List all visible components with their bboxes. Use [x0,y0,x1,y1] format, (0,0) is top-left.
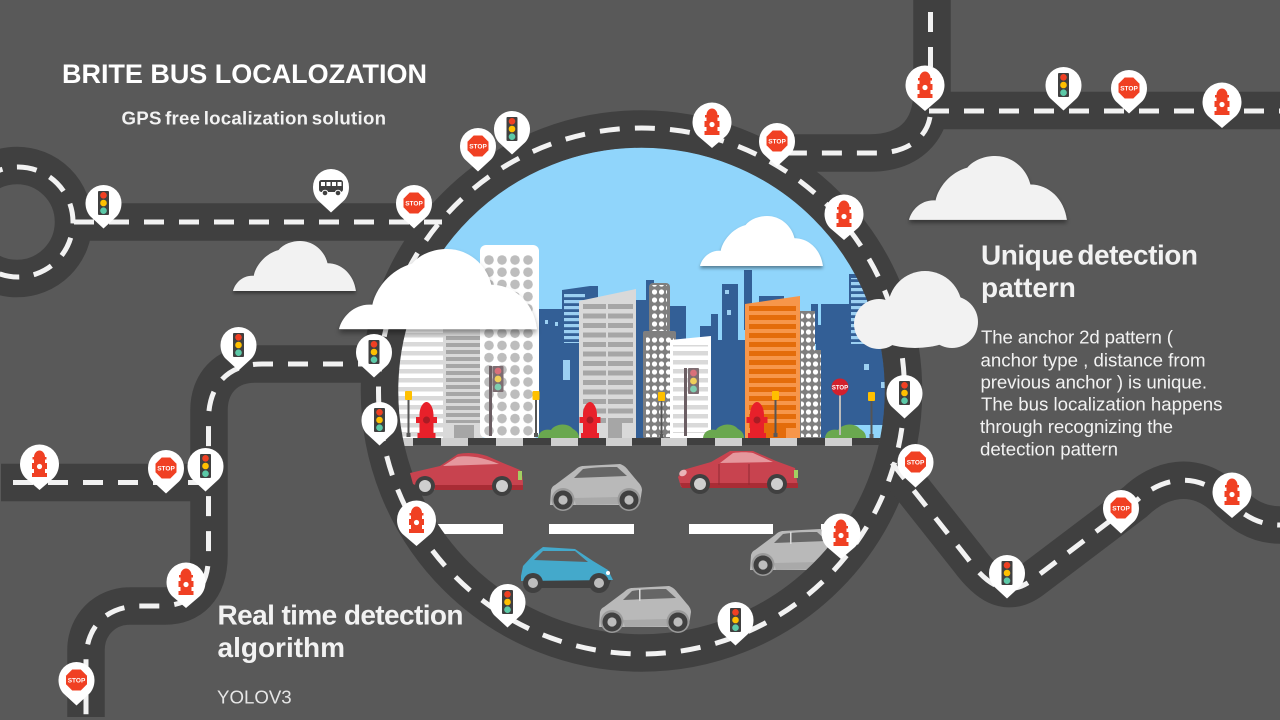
ring road [380,129,904,653]
white dotted tower [480,245,539,438]
street stop sign [832,378,848,435]
clouds [233,156,1067,349]
street traffic lights [489,366,699,436]
street hydrants [416,402,768,438]
pin: stop [58,662,94,706]
pin: stop [898,444,934,488]
subtitle: GPS free localization solution [122,108,386,128]
blue skyline [539,270,885,438]
white striped building [670,336,711,438]
cloud: top right [909,156,1067,220]
pin: stop [1111,70,1147,114]
pin: stop [396,185,432,228]
road: upper left [73,203,445,241]
pin: traffic light [989,555,1025,598]
pin: stop [460,128,496,172]
pin: stop [759,123,795,166]
body text: detection pattern: through recognizing the [980,416,1173,437]
grey car top [550,464,642,511]
pin: traffic light [356,334,392,378]
pin: traffic light [188,448,224,492]
heading: unique detection pattern [981,240,1198,303]
blue car [521,547,613,593]
bushes [538,425,866,438]
orange building [745,296,800,438]
left striped building [398,329,444,438]
pin: stop: STOP [1112,505,1130,512]
pin: hydrant [166,562,206,608]
left roundabout [0,166,74,278]
pin: stop: STOP [157,465,175,472]
street stop sign: STOP [832,386,848,392]
pin: stop [148,450,184,494]
cloud: over road left [233,241,356,291]
heading: real time detection algorithm [218,600,464,663]
body text: detection pattern: The anchor 2d pattern ( [981,326,1174,348]
heading: real time detection algorithm: Real time detection [218,600,464,630]
grey car bottom [599,586,691,633]
pin: traffic light [220,327,256,370]
pin: hydrant [20,444,59,490]
pin: hydrant [692,102,732,148]
body text: yolov3: YOLOV3 [217,686,292,708]
pin: traffic light [494,111,530,154]
title: BRITE BUS LOCALOZATION [62,59,427,89]
body text: detection pattern: anchor type , distance from [980,350,1206,370]
pin: stop [1103,490,1139,534]
pin: traffic light [490,584,526,628]
sky [395,145,890,445]
pin: stop: STOP [1120,85,1138,92]
pin: stop: STOP [469,143,487,150]
red car right [678,451,798,494]
pin: traffic light [886,375,922,418]
body text: detection pattern [980,326,1222,460]
grey car right, partly behind ring road [750,529,842,576]
pin: hydrant [1202,82,1242,128]
heading: real time detection algorithm: algorithm [218,632,345,663]
street lamps [405,391,875,438]
pin: stop: STOP [405,200,423,207]
cloud: right puffy [854,271,978,349]
body text: detection pattern: detection pattern [980,438,1118,460]
pin: bus [313,169,349,212]
body text: detection pattern: previous anchor ) is unique. [980,372,1207,392]
road: top right horizontal [915,92,1280,129]
cloud: large over city [339,249,537,329]
city scene in circle [395,145,890,446]
heading: unique detection pattern: Unique detection [981,240,1198,270]
heading: unique detection pattern: pattern [981,272,1076,303]
pin: traffic light [718,602,754,646]
road: left arm [1,464,205,501]
light grey building [579,289,636,438]
pin: stop: STOP [907,459,925,466]
road: lower right [892,463,1280,589]
lane stripes [437,524,841,534]
road: left winding [86,364,382,717]
pin: traffic light [362,402,398,446]
pin: stop: STOP [68,677,86,684]
pin: stop: STOP [768,138,786,145]
skyline windows [545,278,885,388]
body text: detection pattern: The bus localization happens [981,394,1222,414]
pin: hydrant [824,194,864,240]
red car left [410,453,523,496]
pin: traffic light [86,185,122,228]
pin: hydrant [906,66,944,111]
pin: hydrant [1212,472,1252,518]
second grey tower [800,311,821,438]
road: top right vertical [770,0,932,153]
pin: hydrant [822,514,860,559]
sky cloud [700,216,823,266]
grey building [443,329,483,438]
grey tower dotted [643,283,676,438]
kerb [395,438,890,446]
pin: hydrant [397,500,436,546]
pin: traffic light [1046,67,1082,110]
